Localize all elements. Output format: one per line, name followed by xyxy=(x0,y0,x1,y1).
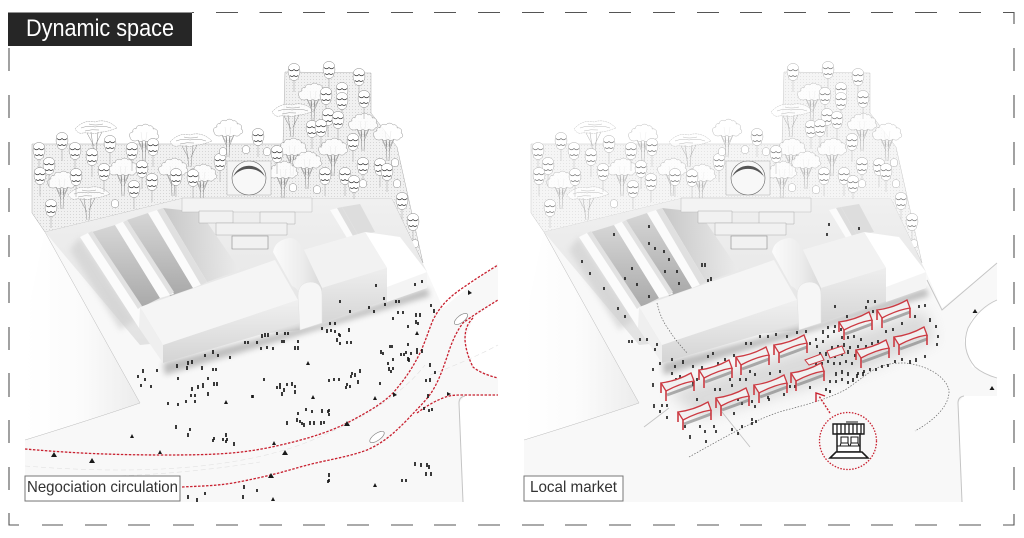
building complex xyxy=(45,161,430,375)
ground plane xyxy=(25,199,498,502)
arrow to market xyxy=(816,393,830,413)
market shadow xyxy=(668,310,935,418)
title: Dynamic space xyxy=(26,15,174,42)
market crowd xyxy=(582,223,938,443)
red circulation routes xyxy=(25,265,498,487)
cyclists xyxy=(972,309,994,390)
label: negociation circulation xyxy=(25,476,180,501)
road guide lines xyxy=(25,345,498,477)
label: local market xyxy=(524,476,623,501)
panel: local market xyxy=(524,62,997,502)
ground plane xyxy=(524,199,997,502)
pedestrians xyxy=(138,280,435,502)
small stands xyxy=(805,354,824,365)
market canopies xyxy=(661,300,927,430)
vehicles xyxy=(368,311,469,445)
label: local market: Local market xyxy=(530,479,618,496)
cyclists xyxy=(51,290,472,501)
dotted market paths xyxy=(657,303,949,457)
icon: market stall xyxy=(820,412,876,470)
forest xyxy=(531,62,922,263)
panel: negociation circulation xyxy=(25,62,498,502)
road outline: roundabout and sidewalks xyxy=(644,263,997,447)
building complex xyxy=(544,161,929,375)
forest xyxy=(32,62,423,263)
label: negociation circulation: Negociation circulation xyxy=(27,479,178,496)
